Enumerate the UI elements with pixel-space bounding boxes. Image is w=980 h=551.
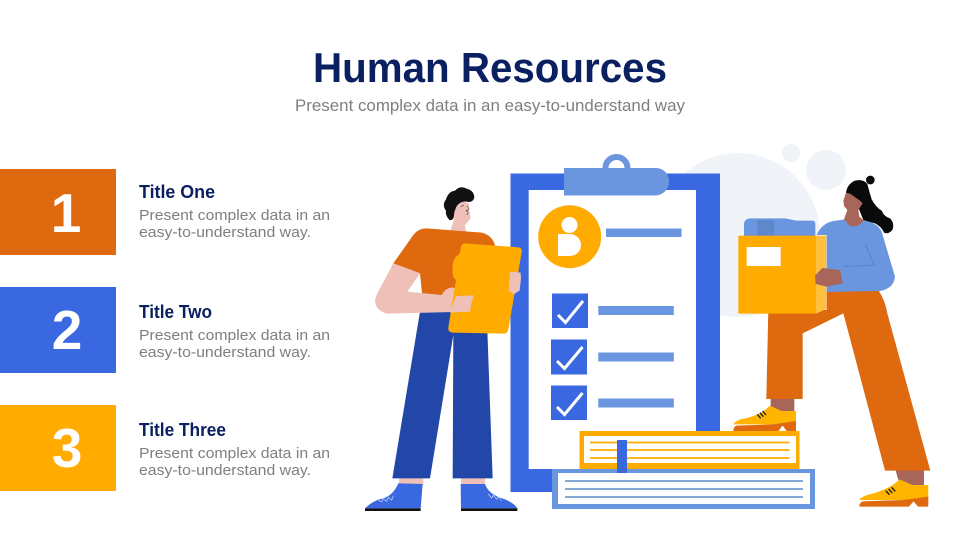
title: Human Resources [313, 44, 667, 91]
panel: item three [0, 405, 330, 491]
woman hand [815, 268, 843, 287]
panel: item two [0, 287, 330, 373]
woman ankles [771, 397, 924, 487]
man arm [375, 263, 474, 314]
woman sweater [817, 219, 895, 292]
number block three [0, 405, 116, 491]
item two description [139, 327, 330, 361]
man legs [392, 312, 493, 485]
item two description: Present complex data in an [139, 327, 330, 344]
icon: book stack [552, 431, 815, 509]
number block two [0, 287, 116, 373]
woman right shoe [733, 406, 796, 431]
man upper body [375, 228, 522, 334]
woman trousers [766, 290, 930, 471]
icon: profile avatar [538, 205, 601, 268]
man shoes [365, 483, 517, 511]
item one description: Present complex data in an [139, 207, 330, 224]
folder [448, 243, 522, 334]
man head [444, 187, 474, 232]
background circles [656, 144, 846, 317]
item three description [139, 445, 330, 479]
icon: clipboard [510, 157, 720, 492]
number block two: 2 [52, 299, 82, 361]
profile line [606, 228, 682, 237]
man hands [450, 272, 521, 313]
checklist [551, 294, 674, 420]
man lower body [365, 312, 517, 511]
fold on items [757, 220, 774, 236]
item one heading: Title One [139, 182, 215, 202]
item three heading: Title Three [139, 420, 226, 440]
number block one: 1 [51, 182, 81, 244]
item one description [139, 207, 330, 241]
woman left shoe [859, 479, 928, 507]
woman hair [846, 176, 893, 233]
item three description: Present complex data in an [139, 445, 330, 462]
sweater fold [843, 243, 874, 267]
subtitle: Present complex data in an easy-to-understand way [295, 97, 686, 115]
woman face and neck [843, 193, 864, 227]
item two heading: Title Two [139, 302, 212, 322]
woman body [733, 218, 930, 507]
illustration: man with folder [365, 187, 522, 511]
woman head [843, 176, 893, 233]
item one description: easy-to-understand way. [139, 224, 311, 241]
item two description: easy-to-understand way. [139, 344, 311, 361]
number block one [0, 169, 116, 255]
number block three: 3 [52, 417, 82, 479]
man shirt [393, 228, 495, 300]
items on box [744, 218, 815, 236]
item three description: easy-to-understand way. [139, 462, 311, 479]
cardboard box [738, 236, 826, 314]
panel: item one [0, 169, 330, 255]
illustration: woman with box [733, 176, 930, 507]
